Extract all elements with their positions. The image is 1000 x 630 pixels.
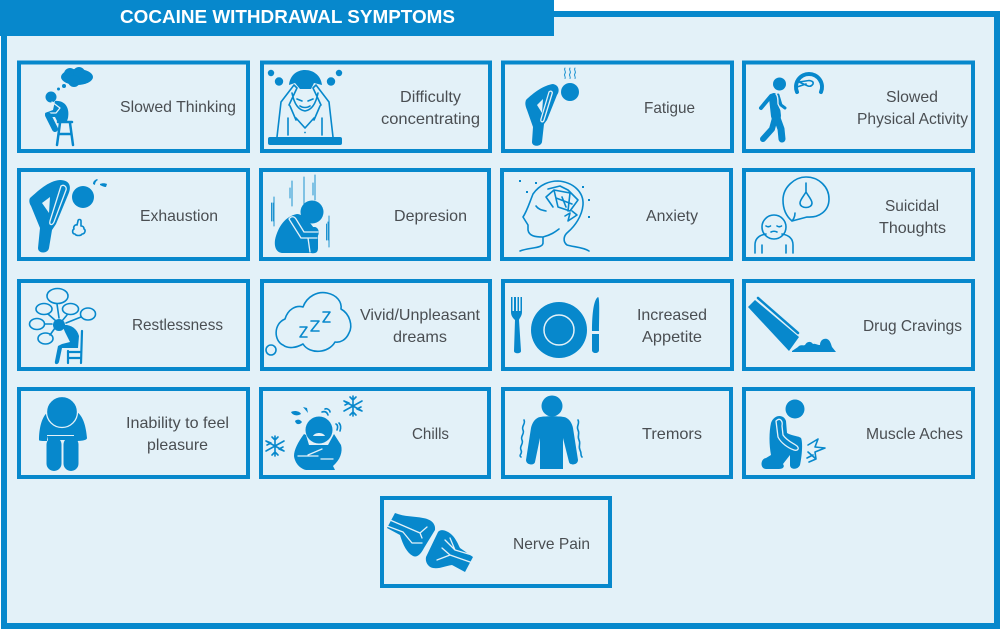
panel: Nerve Pain bbox=[382, 498, 610, 586]
icon: shivering person with snowflakes bbox=[266, 396, 362, 470]
label bbox=[381, 89, 480, 128]
label: Restlessness bbox=[132, 317, 223, 334]
icon: person hugging knees bbox=[272, 175, 329, 253]
label bbox=[126, 415, 229, 454]
icon: nerve synapses bbox=[387, 513, 473, 572]
icon: person thinking on stool bbox=[45, 67, 93, 145]
panel: Difficulty concentrating bbox=[262, 62, 490, 151]
panel: Slowed Thinking bbox=[19, 62, 248, 151]
label bbox=[857, 89, 968, 128]
label: Tremors bbox=[642, 426, 702, 443]
label: dreams bbox=[393, 329, 447, 346]
label: concentrating bbox=[381, 111, 480, 128]
icon: rolled note and powder bbox=[748, 298, 836, 352]
label: Nerve Pain bbox=[513, 536, 590, 553]
panel: Fatigue bbox=[503, 62, 732, 151]
icon: walking person with gauge bbox=[761, 74, 822, 139]
panel: Inability to feel pleasure bbox=[19, 389, 248, 477]
icon: person with bowed head bbox=[39, 396, 87, 471]
icon: kneeling person with knee pain bbox=[762, 400, 825, 469]
panel: Depresion bbox=[261, 170, 489, 259]
label: Chills bbox=[412, 426, 449, 443]
icon: sleep thought cloud bbox=[266, 293, 351, 355]
label: Slowed Thinking bbox=[120, 99, 236, 116]
title banner bbox=[0, 0, 554, 36]
title banner: COCAINE WITHDRAWAL SYMPTOMS bbox=[120, 7, 455, 27]
panel: Anxiety bbox=[502, 170, 731, 259]
label: Fatigue bbox=[644, 100, 695, 117]
icon: shaking person bbox=[520, 396, 582, 469]
icon: seated person surrounded by thoughts bbox=[30, 288, 96, 364]
icon: bent over tired person bbox=[525, 68, 579, 146]
panel: Increased Appetite bbox=[503, 281, 732, 369]
icon: exhausted bent person bbox=[29, 179, 107, 252]
label: Appetite bbox=[642, 329, 702, 346]
label: Depresion bbox=[394, 208, 467, 225]
label: Physical Activity bbox=[857, 111, 968, 128]
panel: Tremors bbox=[503, 389, 731, 477]
label: Inability to feel bbox=[126, 415, 229, 432]
label: Vivid/Unpleasant bbox=[360, 307, 481, 324]
label: Slowed bbox=[886, 89, 938, 106]
panel: Vivid/Unpleasant dreams bbox=[262, 281, 490, 369]
label: Increased bbox=[637, 307, 707, 324]
label: Difficulty bbox=[400, 89, 461, 106]
panel: Suicidal Thoughts bbox=[744, 170, 973, 259]
label: Suicidal bbox=[885, 198, 939, 215]
icon: plate, fork and knife bbox=[511, 297, 599, 358]
label: pleasure bbox=[147, 437, 208, 454]
icon: person holding head bbox=[268, 70, 342, 145]
panel: Chills bbox=[261, 389, 489, 477]
icon: head with tangled thoughts bbox=[519, 180, 590, 251]
label: Exhaustion bbox=[140, 208, 218, 225]
panel: Drug Cravings bbox=[744, 281, 973, 369]
label: Muscle Aches bbox=[866, 426, 963, 443]
panel: Slowed Physical Activity bbox=[744, 62, 973, 151]
label: Drug Cravings bbox=[863, 318, 962, 335]
label bbox=[360, 307, 481, 346]
panel: Exhaustion bbox=[19, 170, 248, 259]
label: Anxiety bbox=[646, 208, 698, 225]
label bbox=[879, 198, 946, 237]
panel: Restlessness bbox=[19, 281, 248, 369]
panel: Muscle Aches bbox=[744, 389, 973, 477]
icon: sad person with noose speech bubble bbox=[755, 177, 829, 253]
label: Thoughts bbox=[879, 220, 946, 237]
label bbox=[637, 307, 707, 346]
